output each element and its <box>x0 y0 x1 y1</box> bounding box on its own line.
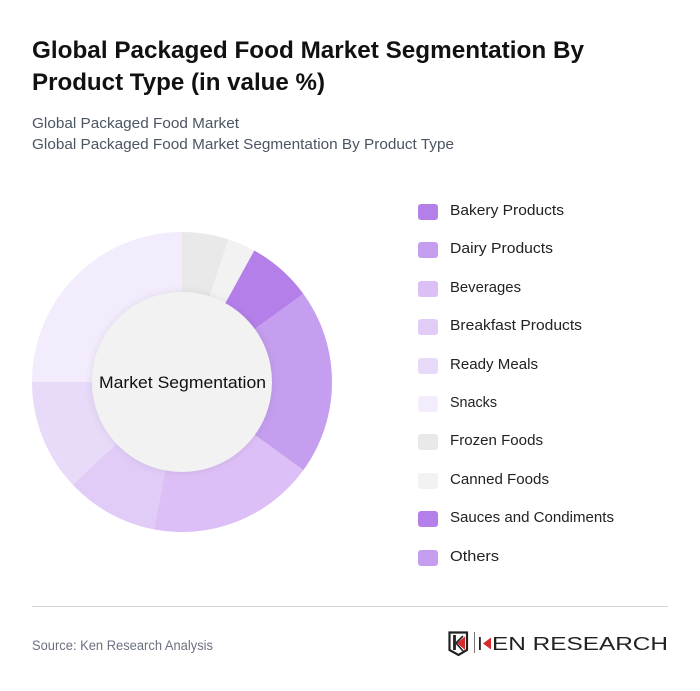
legend item: Beverages: Beverages <box>450 280 521 296</box>
icon: shield <box>450 632 467 655</box>
segment: Others <box>182 294 332 470</box>
source note: Source: Ken Research Analysis <box>32 638 213 653</box>
legend item: Others <box>418 549 499 566</box>
donut chart <box>32 232 332 532</box>
title <box>32 37 584 96</box>
legend item: Dairy Products <box>418 241 553 258</box>
segment: Breakfast Products <box>73 382 182 529</box>
legend item: Ready Meals: Ready Meals <box>450 357 538 373</box>
legend item: Frozen Foods: Frozen Foods <box>450 433 543 449</box>
subtitle <box>32 116 454 153</box>
wordmark <box>479 634 668 654</box>
wordmark: EN RESEARCH <box>492 634 668 654</box>
legend item: Ready Meals <box>418 357 538 374</box>
legend item: Dairy Products: Dairy Products <box>450 241 553 257</box>
legend item: Snacks: Snacks <box>450 395 497 411</box>
donut centre <box>92 292 272 472</box>
segment: Frozen Foods <box>182 232 228 382</box>
segment: Sauces and Condiments <box>182 251 303 382</box>
legend item: Sauces and Condiments: Sauces and Condiments <box>450 510 614 526</box>
centre label: Market Segmentation <box>99 374 266 392</box>
legend item: Others: Others <box>450 549 499 565</box>
legend item: Frozen Foods <box>418 433 543 450</box>
legend item: Canned Foods <box>418 472 549 489</box>
segment: Canned Foods <box>182 239 254 382</box>
legend item: Snacks <box>418 395 497 412</box>
segment: Snacks <box>32 232 182 382</box>
subtitle: Global Packaged Food Market Segmentation By Product Type <box>32 137 454 153</box>
logo: Ken Research <box>450 632 668 655</box>
title: Global Packaged Food Market Segmentation By <box>32 37 584 64</box>
segment: Ready Meals <box>32 382 182 485</box>
title: Product Type (in value %) <box>32 69 325 96</box>
legend item: Bakery Products <box>418 203 564 220</box>
legend <box>418 203 614 566</box>
segment: Beverages <box>154 382 303 532</box>
legend item: Breakfast Products: Breakfast Products <box>450 318 582 334</box>
legend item: Beverages <box>418 280 521 297</box>
subtitle: Global Packaged Food Market <box>32 116 239 132</box>
legend item: Canned Foods: Canned Foods <box>450 472 549 488</box>
legend item: Bakery Products: Bakery Products <box>450 203 564 219</box>
